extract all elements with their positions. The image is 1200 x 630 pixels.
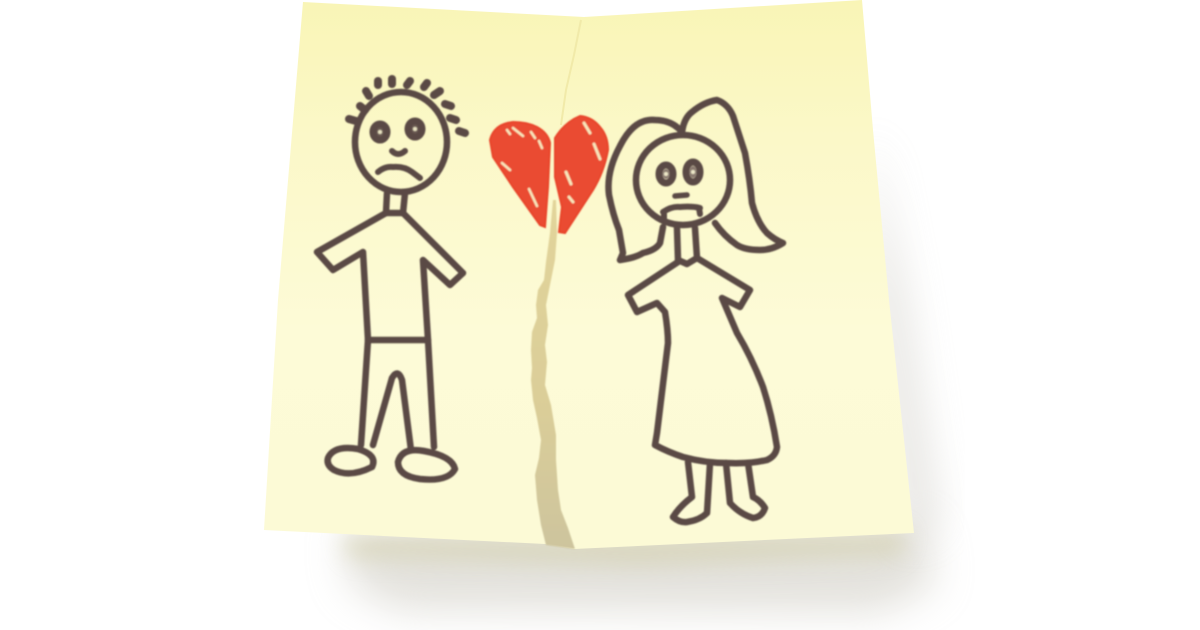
man: trousers and shoes — [361, 340, 434, 450]
woman: head — [636, 135, 730, 225]
man: head — [355, 92, 447, 192]
woman: right hair — [682, 100, 783, 250]
faint crease above heart — [561, 20, 581, 125]
man: eyes — [373, 121, 422, 140]
woman: left hair — [608, 120, 682, 260]
man figure — [317, 79, 465, 480]
man: hair — [349, 79, 465, 133]
woman: legs and feet — [673, 462, 710, 522]
woman: dress — [628, 258, 777, 463]
man: neck and shirt — [386, 193, 405, 213]
woman: nose and mouth — [675, 195, 687, 196]
broken heart: right half — [555, 116, 608, 233]
woman figure — [608, 100, 783, 522]
paper: sticky note — [264, 0, 914, 549]
woman: eyes — [659, 162, 700, 183]
woman: neck — [677, 228, 697, 264]
man: nose and mouth — [378, 151, 420, 178]
broken heart: left half — [490, 122, 550, 227]
torn paper edge — [531, 200, 575, 549]
paper shadow — [340, 130, 938, 612]
